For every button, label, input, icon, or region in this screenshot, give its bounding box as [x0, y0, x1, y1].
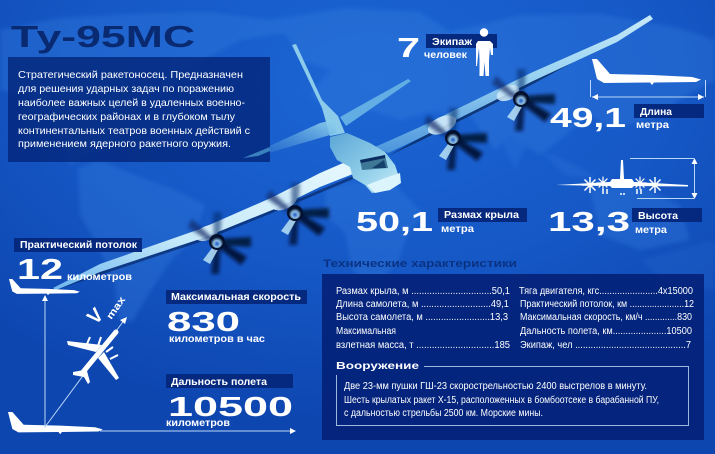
- panel: intro text: применением ядерного ракетного оружия.: [18, 138, 231, 150]
- tail surfaces: [243, 44, 411, 158]
- length block: [550, 102, 704, 133]
- length block: 49,1: [550, 102, 626, 133]
- spec list right: [519, 286, 694, 351]
- flight diagram: [8, 279, 296, 434]
- speed block: 830: [167, 306, 240, 337]
- ceiling block: 12: [17, 254, 63, 286]
- armament: с дальностью стрельбы 2500 км. Морские мины.: [344, 407, 543, 419]
- speed block: [166, 290, 307, 345]
- speed symbol: [83, 294, 128, 329]
- world map: [0, 8, 715, 322]
- length block: метра: [636, 120, 669, 131]
- armament: Две 23-мм пушки ГШ-23 скорострельностью 2400 выстрелов в минуту.: [344, 381, 647, 392]
- specs heading: Технические характеристики: [323, 258, 517, 270]
- spec list right: Максимальная скорость, км/ч .............830: [520, 312, 692, 323]
- range block: [166, 374, 293, 429]
- speed block: километров в час: [169, 334, 265, 345]
- fuselage: [330, 133, 401, 193]
- panel: intro text: [8, 57, 270, 162]
- range block: километров: [166, 418, 230, 429]
- right wing: [375, 15, 653, 156]
- armament: Вооружение: [336, 360, 419, 372]
- speed symbol: V: [83, 304, 109, 329]
- ceiling block: Практический потолок: [20, 240, 138, 251]
- spec list left: Высота самолета, м .........................13,3: [336, 312, 508, 323]
- panel: intro text: для решения ударных задач по поражению: [18, 83, 234, 95]
- spec list right: Практический потолок, км ......................12: [520, 299, 694, 310]
- panel: intro text: Стратегический ракетоносец. Предназначен: [18, 69, 243, 81]
- length block: Длина: [640, 107, 672, 118]
- panel: intro text: наиболее важных целей в удаленных военно-: [18, 97, 245, 109]
- height block: 13,3: [548, 206, 630, 237]
- range block: 10500: [168, 391, 293, 422]
- spec list left: взлетная масса, т ..............................185: [336, 340, 510, 351]
- title: Ту-95МС: [11, 19, 195, 54]
- panel: intro text: географических районах и в глубоком тылу: [18, 111, 236, 123]
- crew block: Экипаж: [432, 37, 473, 48]
- spec list left: Длина самолета, м ...........................49,1: [336, 299, 509, 310]
- wingspan block: метра: [441, 224, 474, 235]
- left wing: [53, 160, 353, 290]
- wingspan block: [356, 206, 527, 237]
- ceiling block: километров: [67, 272, 132, 283]
- speed symbol: max: [105, 294, 128, 322]
- armament: [336, 360, 688, 426]
- icon: height front silhouette: [556, 158, 698, 199]
- height block: Высота: [638, 211, 678, 222]
- spec list left: [336, 286, 510, 351]
- speed block: Максимальная скорость: [171, 292, 301, 303]
- airplane Tu-95MS: [53, 15, 653, 290]
- panel: intro text: континентальных театров военных действий с: [18, 125, 250, 137]
- wingspan block: Размах крыла: [444, 210, 519, 221]
- spec list right: Экипаж, чел ...........................................7: [520, 340, 691, 351]
- icon: plane top view: [67, 332, 119, 384]
- icon: length silhouette: [590, 59, 706, 100]
- crew block: 7: [397, 32, 420, 63]
- crew block: человек: [424, 50, 468, 61]
- icon: pilot: [476, 28, 493, 76]
- propellers: [188, 69, 555, 274]
- range block: Дальность полета: [171, 377, 267, 388]
- height block: [548, 206, 702, 237]
- spec list right: Дальность полета, км.....................10500: [520, 326, 692, 337]
- armament: Шесть крылатых ракет Х-15, расположенных в бомбоотсеке в барабанной ПУ,: [344, 394, 659, 406]
- spec list right: Тяга двигателя, кгс.......................4х15000: [519, 286, 693, 297]
- crew block: [397, 32, 497, 63]
- spec list left: Максимальная: [336, 326, 396, 337]
- spec list left: Размах крыла, м ...............................50,1: [336, 286, 510, 297]
- height block: метра: [635, 225, 667, 236]
- ceiling block: [14, 238, 142, 286]
- engine nacelles: [193, 82, 522, 244]
- panel: technical specs: [322, 274, 704, 440]
- wingspan block: 50,1: [356, 206, 433, 237]
